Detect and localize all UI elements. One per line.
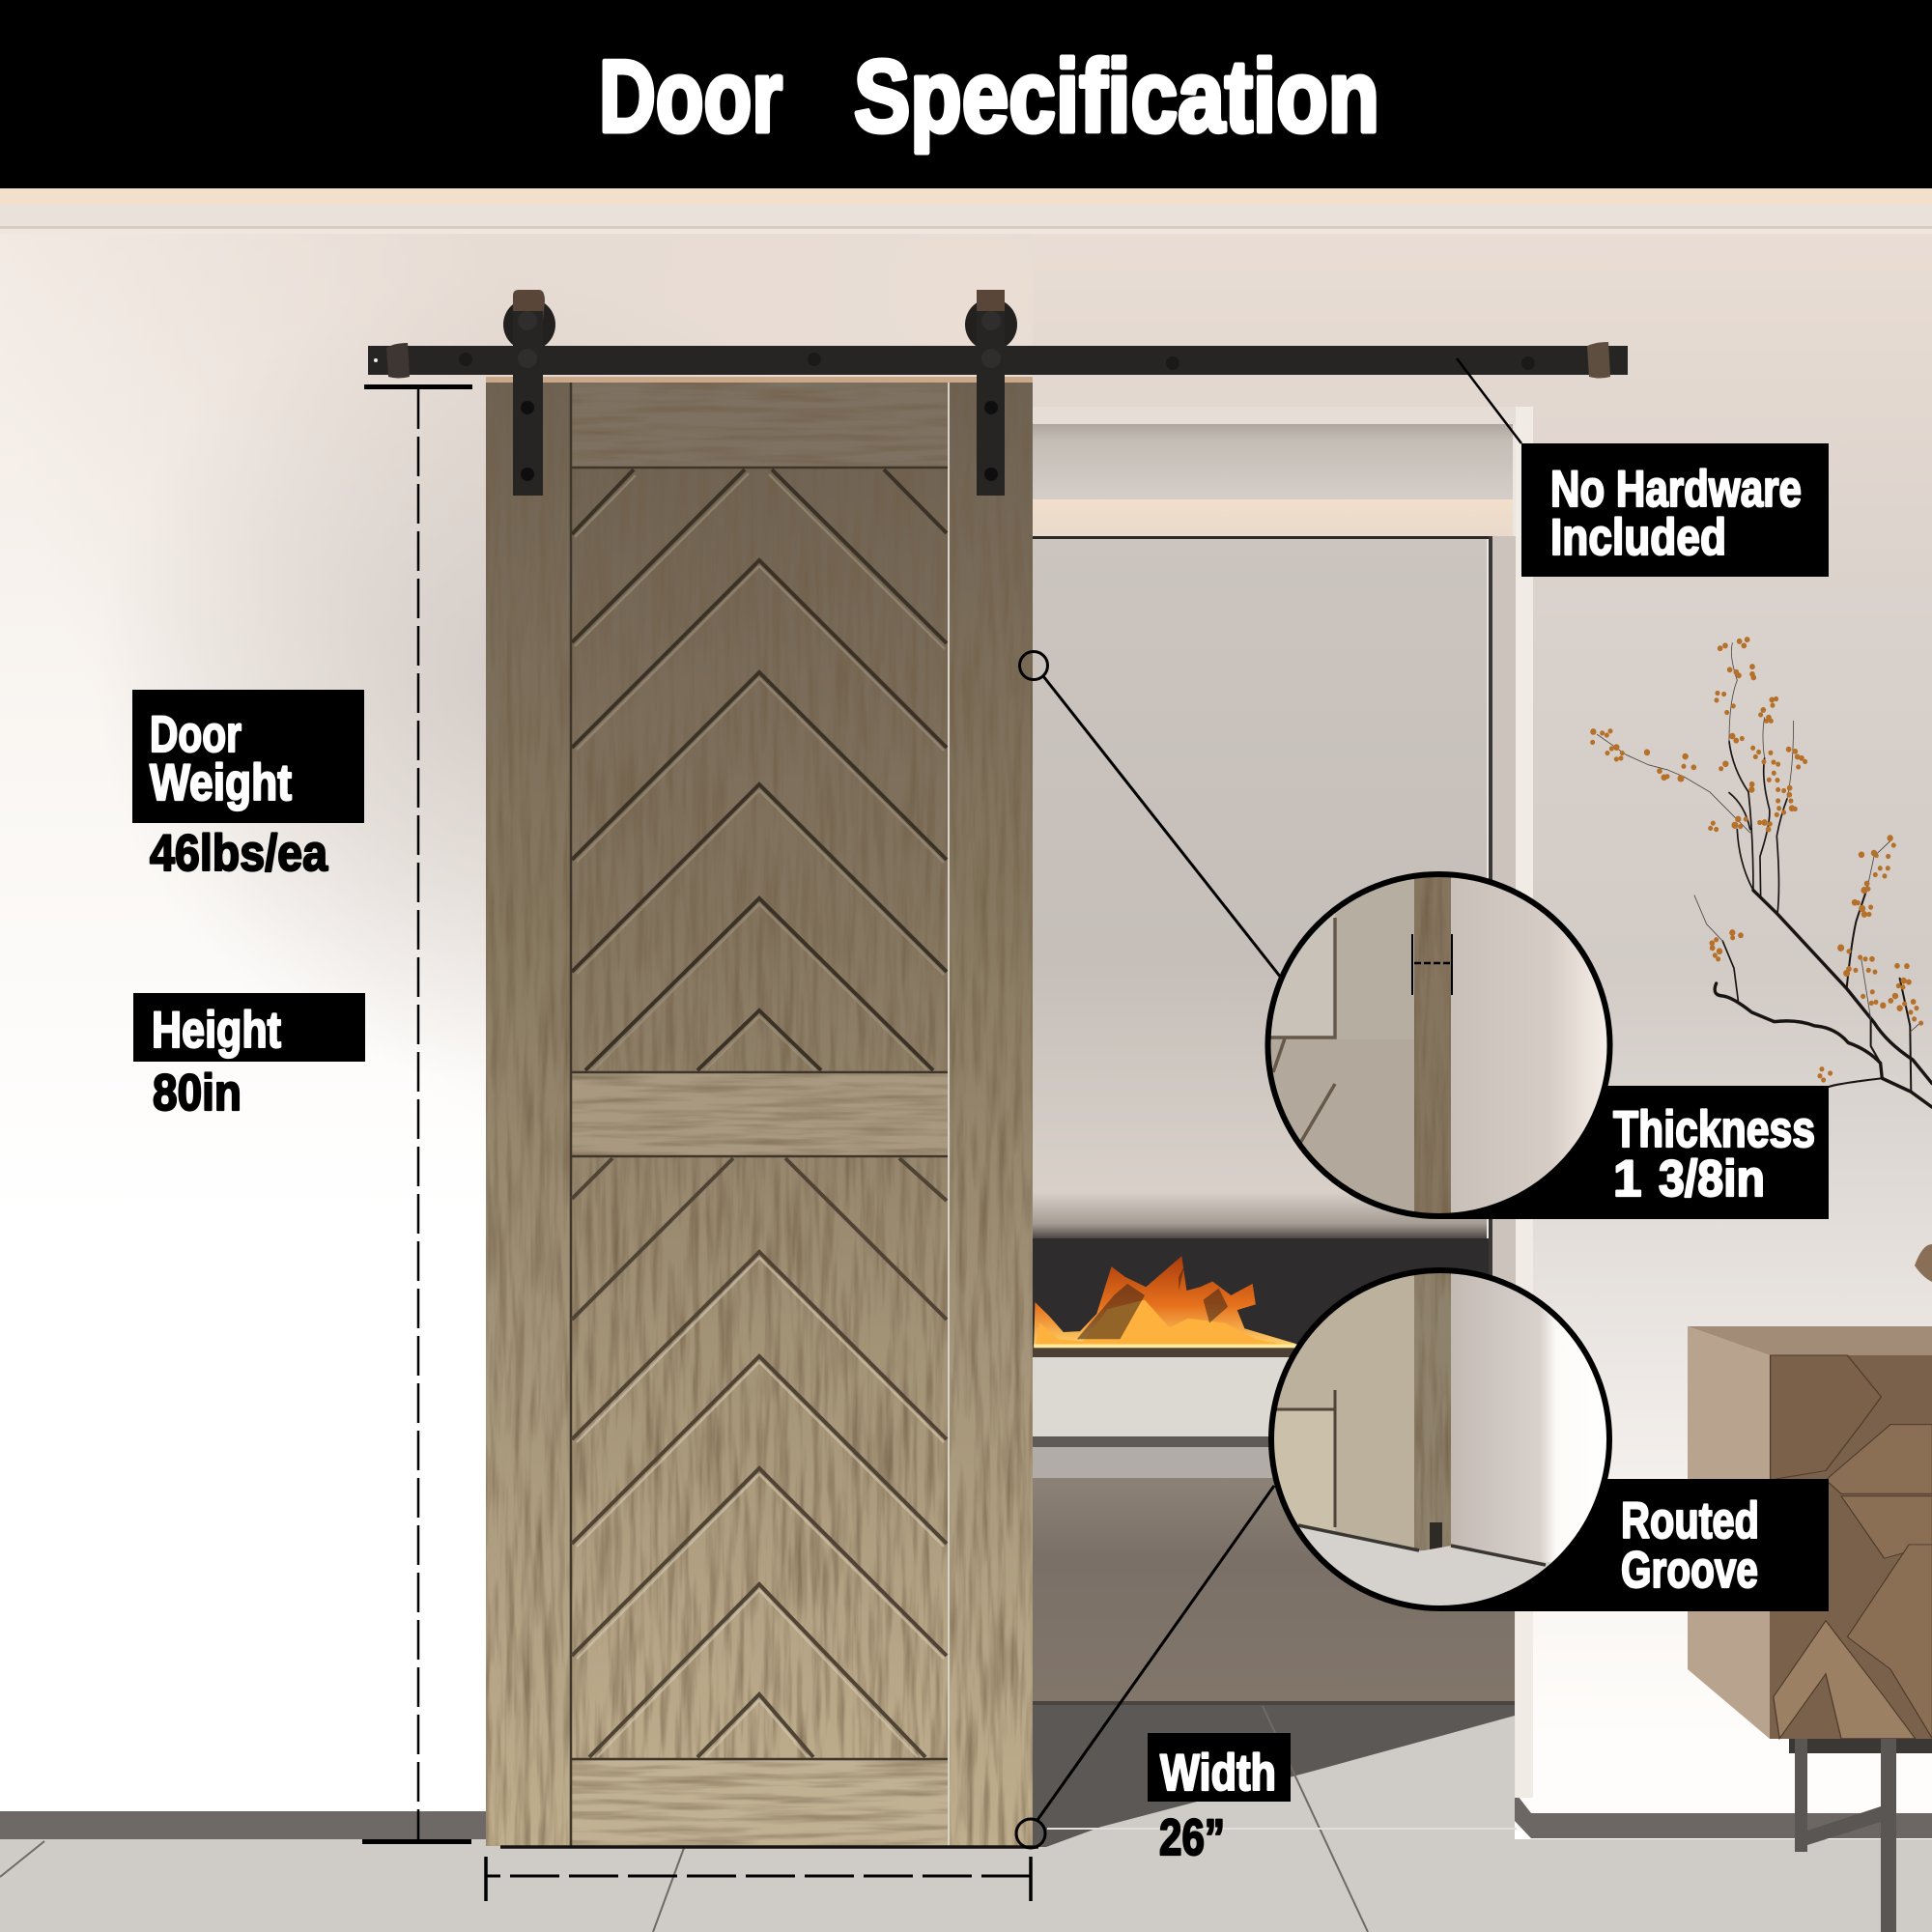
door centre panels — [572, 468, 949, 1759]
magnified detail: routed groove — [1268, 1267, 1612, 1611]
height dimension line — [362, 384, 472, 1844]
magnified detail: door thickness — [1256, 869, 1623, 1227]
callout: width — [1148, 1733, 1291, 1866]
wheel backs — [503, 298, 1017, 351]
callout: width: 26” — [1159, 1809, 1225, 1866]
rail stopper right — [1587, 342, 1610, 379]
top rail — [572, 383, 948, 468]
title — [599, 40, 1379, 154]
door stiles — [486, 383, 1033, 1846]
chevron grooves upper panel — [572, 469, 947, 1070]
callout: door weight: 46lbs/ea — [150, 825, 327, 882]
chevron grooves lower panel — [572, 1158, 947, 1757]
hanger strap right — [977, 290, 1005, 496]
doorway opening scene — [0, 407, 1533, 1932]
hanger strap left — [513, 290, 545, 496]
width dimension line — [486, 1857, 1031, 1901]
interior floor — [1033, 1705, 1515, 1840]
callout: no hardware included: Included — [1550, 509, 1726, 566]
thickness measure marks — [1412, 934, 1452, 995]
callout: thickness label: Thickness — [1613, 1101, 1815, 1158]
icon: fireplace flames — [1034, 1256, 1297, 1348]
callout: door weight: Door — [150, 706, 242, 763]
middle rail — [572, 1072, 948, 1156]
callout: routed groove label — [1439, 1479, 1829, 1611]
callout: height — [133, 993, 365, 1122]
rail stopper left — [386, 343, 410, 379]
callout marker: routed groove leader — [1016, 1486, 1274, 1848]
stile joints — [570, 383, 572, 1846]
callout: door weight: Weight — [150, 754, 292, 811]
callout: thickness label: 3/8in — [1659, 1151, 1765, 1208]
sliding track rail — [368, 298, 1628, 379]
callout: door weight — [132, 690, 364, 882]
callout: thickness label — [1439, 1086, 1829, 1219]
callout: no hardware included — [1457, 358, 1829, 577]
floor and baseboard — [0, 1792, 1932, 1932]
icon: decorative berry branch — [1591, 638, 1932, 1107]
rail bolts — [459, 353, 1535, 370]
callout: no hardware included: No Hardware — [1550, 461, 1802, 518]
door vertical wood grain — [486, 383, 1033, 1846]
door top edge — [486, 377, 1033, 384]
callout: width: Width — [1160, 1745, 1276, 1802]
barn door — [486, 377, 1038, 1847]
cabinet — [1688, 1244, 1932, 1932]
callout: height: Height — [152, 1002, 281, 1059]
door bottom shadow — [500, 1845, 1038, 1849]
title: Specification — [854, 40, 1379, 154]
callout marker: thickness leader — [1020, 651, 1281, 978]
title: Door — [599, 40, 782, 154]
callout: routed groove label: Groove — [1621, 1542, 1758, 1599]
bottom rail — [572, 1759, 948, 1846]
callout: thickness label: 1 — [1613, 1151, 1641, 1208]
callout: height: 80in — [153, 1065, 242, 1122]
title banner — [0, 0, 1932, 188]
ceiling cornice — [0, 188, 1932, 234]
callout: routed groove label: Routed — [1621, 1492, 1759, 1549]
